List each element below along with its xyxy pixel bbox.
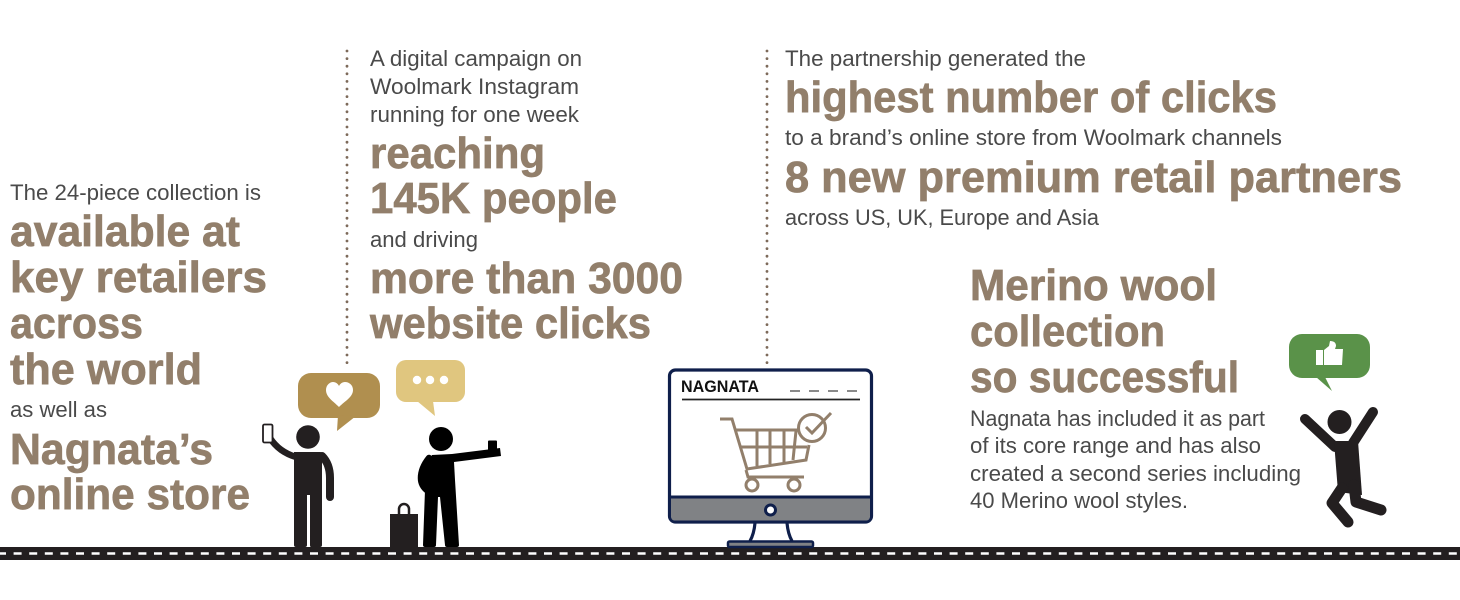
text block: digital campaign: running for one week xyxy=(370,102,580,127)
text block: retail availability: as well as xyxy=(10,397,107,422)
text block: partnership results: to a brand’s online store from Woolmark channels xyxy=(785,125,1282,150)
text block: Merino wool success xyxy=(970,261,1301,513)
text block: retail availability xyxy=(10,180,267,519)
icon: heart speech bubble xyxy=(298,373,380,431)
text block: digital campaign: Woolmark Instagram xyxy=(370,74,579,99)
text block: partnership results: 8 new premium retail partners xyxy=(785,153,1402,202)
text block: Merino wool success: Nagnata has included it as part xyxy=(970,406,1265,431)
text block: partnership results: The partnership generated the xyxy=(785,46,1086,71)
text block: Merino wool success: created a second series including xyxy=(970,461,1301,486)
icon: person with drink and shopping bag xyxy=(390,427,501,547)
text block: digital campaign: reaching xyxy=(370,129,545,178)
road xyxy=(0,547,1460,560)
text block: digital campaign: A digital campaign on xyxy=(370,46,582,71)
text block: partnership results: across US, UK, Europe and Asia xyxy=(785,205,1100,230)
icon: person with phone xyxy=(263,424,330,547)
icon: computer monitor with online store: NAGNATA xyxy=(681,378,759,396)
text block: retail availability: key retailers xyxy=(10,253,267,302)
text block: digital campaign xyxy=(369,46,683,348)
text block: Merino wool success: collection xyxy=(970,307,1165,356)
text block: digital campaign: 145K people xyxy=(370,174,617,223)
text block: Merino wool success: Merino wool xyxy=(970,261,1217,310)
text block: retail availability: available at xyxy=(10,207,240,256)
text block: Merino wool success: of its core range and has also xyxy=(970,433,1261,458)
text block: retail availability: Nagnata’s xyxy=(10,425,213,474)
text block: Merino wool success: 40 Merino wool styles. xyxy=(970,488,1188,513)
text block: retail availability: across xyxy=(10,299,143,348)
text block: partnership results: highest number of clicks xyxy=(785,73,1277,122)
text block: digital campaign: website clicks xyxy=(369,299,651,348)
icon: dots speech bubble xyxy=(396,360,465,416)
icon: jumping person xyxy=(1305,410,1381,522)
text block: retail availability: online store xyxy=(10,470,250,519)
text block: digital campaign: and driving xyxy=(370,227,478,252)
icon: shopping cart xyxy=(720,413,831,491)
text block: digital campaign: more than 3000 xyxy=(370,254,683,303)
text block: Merino wool success: so successful xyxy=(970,353,1239,402)
text block: retail availability: The 24-piece collection is xyxy=(10,180,261,205)
icon: thumbs-up speech bubble xyxy=(1289,334,1370,391)
text block: retail availability: the world xyxy=(10,345,202,394)
icon: computer monitor with online store xyxy=(669,370,872,547)
text block: partnership results xyxy=(785,46,1402,230)
